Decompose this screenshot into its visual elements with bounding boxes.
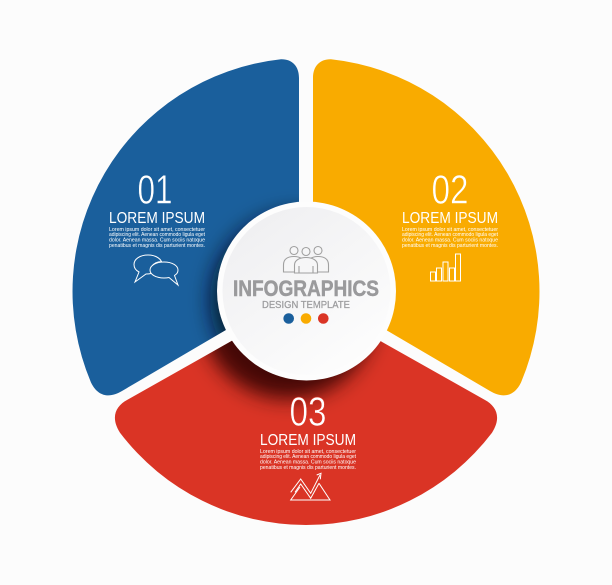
number 01: 01 — [138, 166, 172, 212]
body text — [109, 227, 206, 249]
panel: 02 yellow — [313, 59, 539, 395]
panel: 01 blue — [72, 59, 299, 396]
title: INFOGRAPHICS — [233, 276, 379, 301]
body text: Lorem ipsum dolor sit amet, consectetuer — [109, 227, 205, 233]
infographic — [72, 59, 540, 525]
subtitle: DESIGN TEMPLATE — [262, 299, 350, 311]
icon: bar chart — [430, 254, 460, 281]
body text: dolor. Aenean massa. Cum sociis natoque — [109, 238, 205, 244]
body text: Lorem ipsum dolor sit amet, consectetuer — [402, 227, 498, 233]
body text — [260, 449, 357, 471]
body text: adipiscing elit. Aenean commodo ligula eget — [402, 232, 499, 238]
colour dots — [283, 313, 329, 324]
body text: penatibus et magnis dis parturient montes. — [402, 243, 498, 249]
icon: speech bubbles — [134, 255, 178, 285]
body text: adipiscing elit. Aenean commodo ligula eget — [260, 454, 357, 460]
panel: 03 red — [114, 340, 498, 525]
heading: LOREM IPSUM — [402, 210, 498, 227]
center circle — [217, 202, 396, 380]
body text: adipiscing elit. Aenean commodo ligula eget — [109, 232, 206, 238]
number 03: 03 — [290, 388, 326, 434]
icon: mountain trend — [291, 473, 330, 500]
number 02: 02 — [432, 166, 468, 212]
body text: penatibus et magnis dis parturient montes. — [109, 243, 205, 249]
body text — [402, 227, 499, 249]
circle shadow on red — [197, 340, 386, 415]
circle shadow on blue — [196, 198, 299, 342]
heading: LOREM IPSUM — [260, 432, 356, 449]
body text: penatibus et magnis dis parturient montes. — [260, 465, 356, 471]
heading: LOREM IPSUM — [109, 210, 205, 227]
body text: Lorem ipsum dolor sit amet, consectetuer — [260, 449, 356, 455]
body text: dolor. Aenean massa. Cum sociis natoque — [402, 238, 498, 244]
icon: people — [284, 246, 328, 273]
body text: dolor. Aenean massa. Cum sociis natoque — [260, 460, 356, 466]
